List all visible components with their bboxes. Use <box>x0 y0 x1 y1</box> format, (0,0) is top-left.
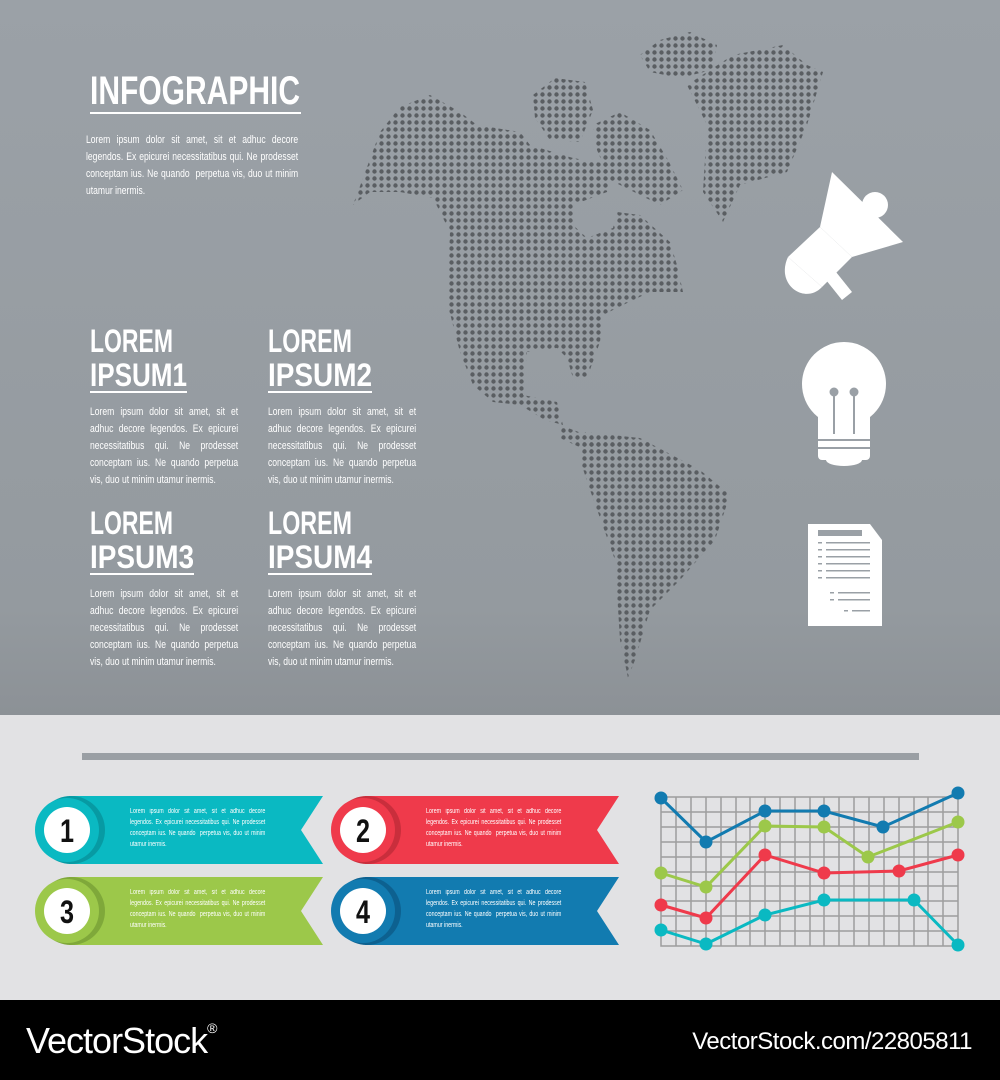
panel: top gray area <box>0 0 1000 715</box>
ribbon 2 <box>331 796 619 864</box>
text block 1: Lorem ipsum dolor sit amet, sit et adhuc decore legendos. Ex epicurei necessitatibus qui. Ne prodesset conceptam ius. Ne quando perpetua vis, duo ut minim utamur inermis. <box>90 406 238 486</box>
ribbon 4 <box>331 877 619 945</box>
footer url: VectorStock.com/22805811 <box>692 1028 972 1055</box>
ribbon 1: 1 <box>60 813 74 849</box>
footer brand: VectorStock® <box>26 1020 216 1061</box>
icon: light bulb <box>802 342 886 466</box>
ribbon 3: 3 <box>60 894 74 930</box>
heading: lorem ipsum 3 <box>90 505 194 575</box>
heading: lorem ipsum 2 <box>268 323 372 393</box>
icon: document <box>808 524 882 626</box>
ribbon 2: Lorem ipsum dolor sit amet, sit et adhuc decore legendos. Ex epicurei necessitatibus qui. Ne prodesset conceptam ius. Ne quando perpetua vis, duo ut minim utamur inermis. <box>426 808 561 848</box>
text block 4: Lorem ipsum dolor sit amet, sit et adhuc decore legendos. Ex epicurei necessitatibus qui. Ne prodesset conceptam ius. Ne quando perpetua vis, duo ut minim utamur inermis. <box>268 588 416 668</box>
ribbon 1: Lorem ipsum dolor sit amet, sit et adhuc decore legendos. Ex epicurei necessitatibus qui. Ne prodesset conceptam ius. Ne quando perpetua vis, duo ut minim utamur inermis. <box>130 808 265 848</box>
panel: bottom light area <box>0 715 1000 1000</box>
ribbon 3: Lorem ipsum dolor sit amet, sit et adhuc decore legendos. Ex epicurei necessitatibus qui. Ne prodesset conceptam ius. Ne quando perpetua vis, duo ut minim utamur inermis. <box>130 889 265 929</box>
icon: megaphone <box>784 172 903 300</box>
footer <box>0 1000 1000 1080</box>
ribbon 2: 2 <box>356 813 370 849</box>
text block 3: Lorem ipsum dolor sit amet, sit et adhuc decore legendos. Ex epicurei necessitatibus qui. Ne prodesset conceptam ius. Ne quando perpetua vis, duo ut minim utamur inermis. <box>90 588 238 668</box>
map: dotted americas <box>353 32 823 677</box>
ribbon 4: 4 <box>356 894 370 930</box>
heading: lorem ipsum 1 <box>90 323 187 393</box>
heading: lorem ipsum 4 <box>268 505 372 575</box>
ribbon 1 <box>35 796 323 864</box>
text block: intro: Lorem ipsum dolor sit amet, sit et adhuc decore legendos. Ex epicurei necessitatibus qui. Ne prodesset conceptam ius. Ne quando perpetua vis, duo ut minim utamur inermis. <box>86 134 298 197</box>
divider bar <box>82 753 919 760</box>
ribbon 3 <box>35 877 323 945</box>
text block 2: Lorem ipsum dolor sit amet, sit et adhuc decore legendos. Ex epicurei necessitatibus qui. Ne prodesset conceptam ius. Ne quando perpetua vis, duo ut minim utamur inermis. <box>268 406 416 486</box>
ribbon 4: Lorem ipsum dolor sit amet, sit et adhuc decore legendos. Ex epicurei necessitatibus qui. Ne prodesset conceptam ius. Ne quando perpetua vis, duo ut minim utamur inermis. <box>426 889 561 929</box>
